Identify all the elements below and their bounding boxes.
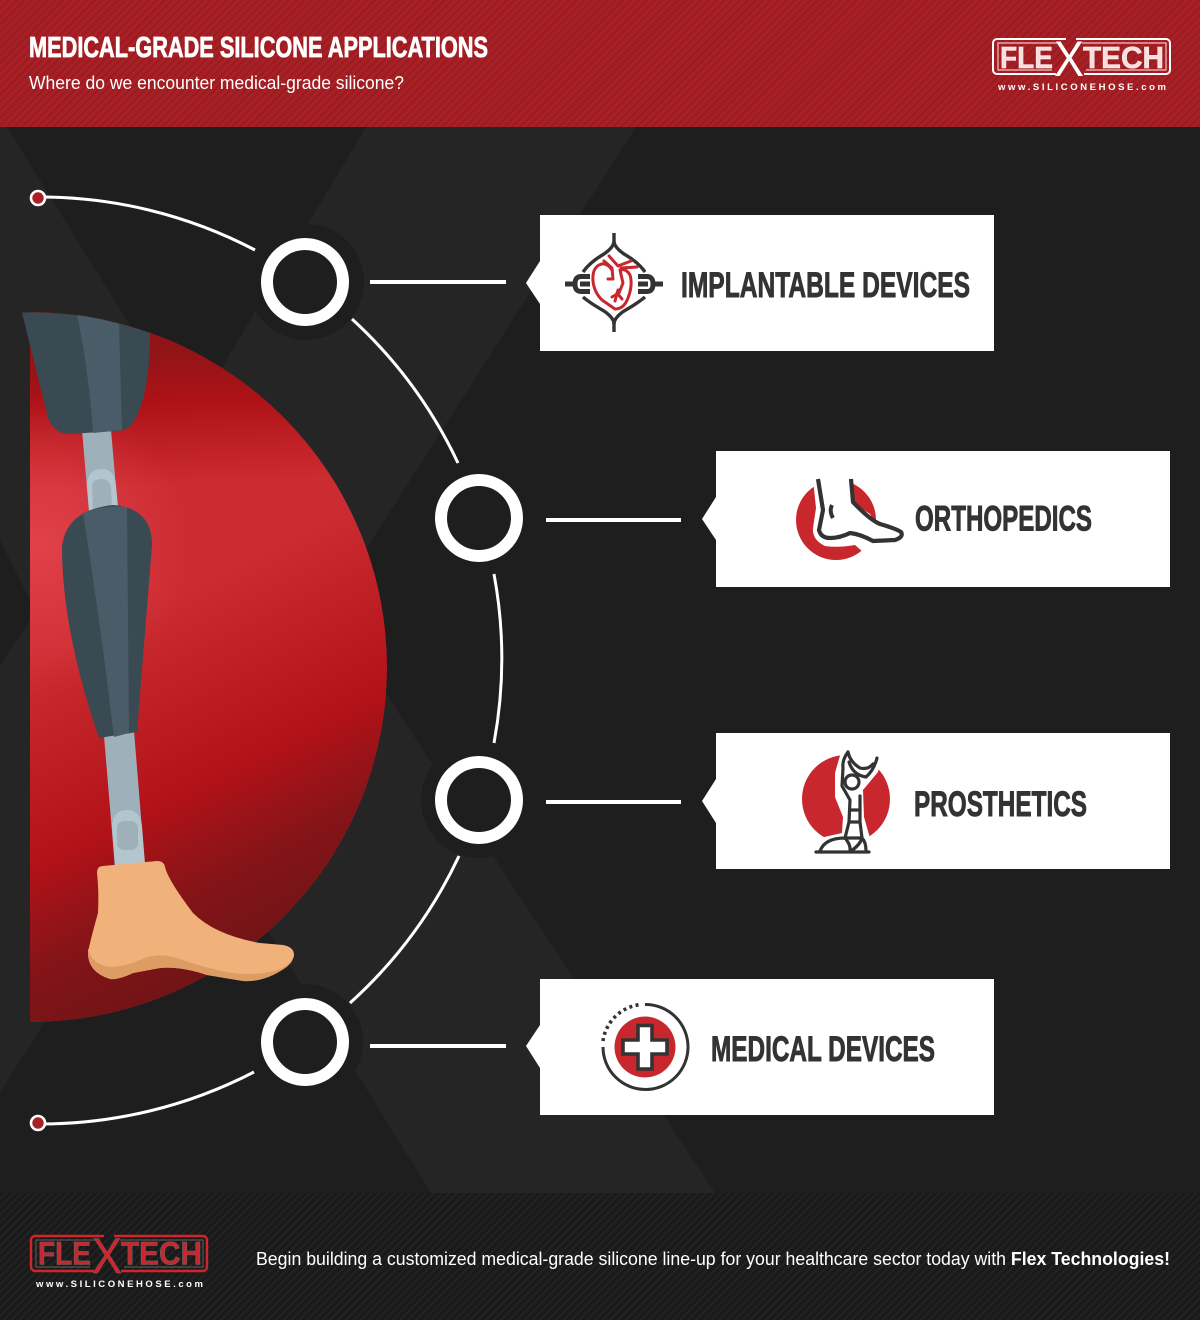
logo: footer Flextech: www.SILICONEHOSE.com [35,1279,203,1290]
logo: header Flextech: TECH [1083,40,1164,75]
node halos [247,224,537,1100]
lower pylon [104,731,145,868]
node ring 3 [441,762,517,838]
node ring 4 [267,1004,343,1080]
connecting arc [38,197,502,1124]
logo: header Flextech: FLE [1000,40,1053,75]
header banner [0,0,1200,127]
panel: prosthetics [702,733,1170,869]
logo: header Flextech: www.SILICONEHOSE.com [997,82,1166,93]
logo: footer Flextech [31,1228,207,1290]
logo: footer Flextech: TECH [121,1236,202,1272]
panel: orthopedics [702,451,1170,587]
panel: medical devices [526,979,994,1115]
label: ORTHOPEDICS [915,498,1092,538]
label: IMPLANTABLE DEVICES [681,265,970,305]
node ring 2 [441,480,517,556]
call to action text: Begin building a customized medical-grade silicone line-up for your healthcare sector today with Flex Technologies! [256,1249,1170,1269]
label: MEDICAL DEVICES [711,1029,935,1069]
footer banner [0,1193,1200,1320]
arc end dot: bottom [31,1116,45,1130]
node ring 1 [267,244,343,320]
label: PROSTHETICS [914,784,1087,824]
icon: prosthetic leg [802,745,890,860]
panel: implantable devices [526,215,994,351]
icon: medical cross [603,1004,688,1089]
logo: header Flextech: X [1054,31,1084,87]
logo: header Flextech [993,31,1170,93]
icon: foot [796,470,915,560]
prosthetic leg illustration [22,312,294,981]
upper pylon [82,430,118,512]
foot [88,861,294,981]
subtitle: Where do we encounter medical-grade silicone? [29,73,404,93]
title: MEDICAL-GRADE SILICONE APPLICATIONS [29,32,488,64]
socket [22,312,150,434]
arc end dot: top [31,191,45,205]
logo: footer Flextech: X [92,1228,122,1284]
logo: footer Flextech: FLE [38,1236,91,1272]
red half circle [30,312,387,1022]
icon: heart implant [565,233,663,332]
calf [62,505,152,738]
